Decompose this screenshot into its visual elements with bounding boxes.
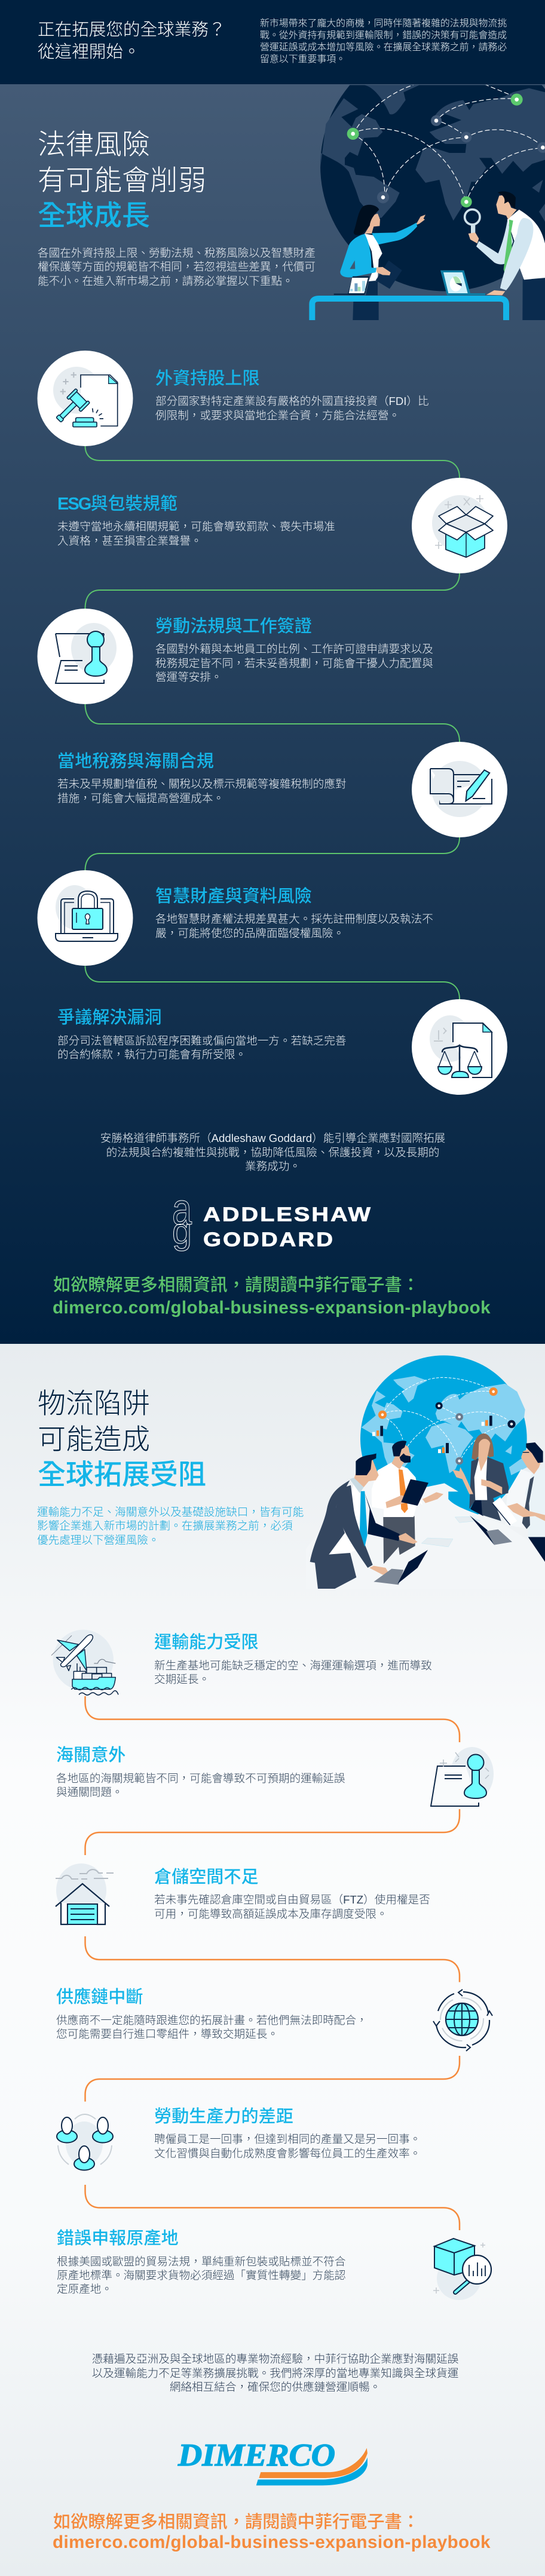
intro heading: 從這裡開始。 xyxy=(38,42,140,61)
icon: box under magnifier xyxy=(433,2239,491,2300)
section lead paragraph: 權保護等方面的規範皆不相同，若忽視這些差異，代價可 xyxy=(38,260,316,273)
connector 4 xyxy=(85,2056,460,2102)
section lead paragraph: 運輸能力不足、海關意外以及基礎設施缺口，皆有可能 xyxy=(37,1506,304,1518)
connector 1 xyxy=(85,1696,460,1742)
intro heading: 正在拓展您的全球業務？ xyxy=(38,20,226,39)
risk: local tax and customs xyxy=(57,752,346,805)
risk: transport capacity: 交期延長。 xyxy=(154,1673,210,1685)
icon: three workers xyxy=(57,2114,113,2170)
risk: dispute resolution: 部分司法管轄區訴訟程序困難或偏向當地一方。若缺乏完善 xyxy=(57,1034,346,1047)
section title xyxy=(38,1387,206,1490)
intro paragraph: 營運延誤或成本增加等風險。在擴展全球業務之前，請務必 xyxy=(260,42,507,53)
illustration: globe with business team xyxy=(306,1355,545,1589)
icon: laptop with padlock xyxy=(37,870,133,966)
icon: rotating globe xyxy=(433,1989,492,2051)
icon: gavel and document xyxy=(37,351,133,446)
risk: IP and data xyxy=(155,887,433,939)
closing text: Addleshaw Goddard xyxy=(100,1132,445,1172)
connector 1 xyxy=(85,446,460,478)
logo: Addleshaw Goddard: a xyxy=(172,1184,192,1234)
section title: 有可能會削弱 xyxy=(38,164,206,196)
logo: Addleshaw Goddard: GODDARD xyxy=(203,1229,335,1251)
section lead paragraph xyxy=(37,1506,304,1546)
section title: 可能造成 xyxy=(38,1423,150,1455)
closing text: Addleshaw Goddard: 的法規與合約複雜性與挑戰，協助降低風險、保護投資，以及長期的 xyxy=(106,1146,439,1159)
risk: customs surprises xyxy=(56,1746,345,1798)
connector 4 xyxy=(85,837,460,871)
risk: labour law and visas: 各國對外籍與本地員工的比例、工作許可證申請要求以及 xyxy=(155,643,433,655)
section title: 全球拓展受阻 xyxy=(38,1459,206,1490)
risk: ESG and packaging: 入資格，甚至損害企業聲譽。 xyxy=(57,535,202,547)
risk: warehouse space: 若未事先確認倉庫空間或自由貿易區（FTZ）使用權是否 xyxy=(154,1893,430,1906)
risk: country of origin: 原產地標準。海關要求貨物必須經過「實質性轉變」方能認 xyxy=(57,2269,345,2282)
risk: warehouse space xyxy=(154,1867,430,1920)
risk: transport capacity xyxy=(154,1633,432,1685)
logo: Dimerco: DIMERCO xyxy=(177,2438,335,2473)
call to action: green: 如欲瞭解更多相關資訊，請閱讀中菲行電子書： xyxy=(53,1276,420,1295)
risk: warehouse space: 可用，可能導致高額延誤成本及庫存調度受限。 xyxy=(154,1908,387,1920)
call to action: orange: dimerco.com/global-business-expansion-playbook xyxy=(53,2532,491,2552)
intro paragraph: 戰。從外資持有規範到運輸限制，錯誤的決策有可能會造成 xyxy=(260,30,507,41)
risk: country of origin: 根據美國或歐盟的貿易法規，單純重新包裝或貼標並不符合 xyxy=(57,2255,345,2268)
risk: labour productivity: 聘僱員工是一回事，但達到相同的產量又是另一回事。 xyxy=(154,2133,421,2145)
risk: local tax and customs: 若未及早規劃增值稅、關稅以及標示規範等複雜稅制的應對 xyxy=(57,778,346,790)
risk: ESG and packaging: ESG與包裝規範 xyxy=(57,495,177,514)
icon: stamp and document xyxy=(37,609,133,704)
closing text: Addleshaw Goddard: 安勝格道律師事務所（Addleshaw Goddard）能引導企業應對國際拓展 xyxy=(100,1132,445,1144)
risk: local tax and customs: 當地稅務與海關合規 xyxy=(57,752,214,771)
logo: Dimerco xyxy=(177,2438,368,2485)
icon: scales and document xyxy=(412,999,507,1095)
intro paragraph xyxy=(260,18,507,65)
risk: transport capacity: 新生產基地可能缺乏穩定的空、海運運輸選項，進而導致 xyxy=(154,1659,432,1672)
risk: supply chain disruption: 您可能需要自行進口零組件，導致交期延長。 xyxy=(56,2028,278,2040)
risk: labour law and visas: 勞動法規與工作簽證 xyxy=(155,617,312,636)
section title: 全球成長 xyxy=(38,199,150,231)
risk: supply chain disruption: 供應商不一定能隨時跟進您的拓展計畫。若他們無法即時配合， xyxy=(56,2014,368,2027)
risk: IP and data: 各地智慧財產權法規差異甚大。採先註冊制度以及執法不 xyxy=(155,913,433,925)
intro paragraph: 新市場帶來了龐大的商機，同時伴隨著複雜的法規與物流挑 xyxy=(260,19,507,29)
call to action: green: dimerco.com/global-business-expansion-playbook xyxy=(53,1297,491,1318)
risk: customs surprises: 各地區的海關規範皆不同，可能會導致不可預期的運輸延誤 xyxy=(56,1772,345,1785)
closing text: Dimerco: 網絡相互結合，確保您的供應鏈營運順暢。 xyxy=(170,2381,381,2393)
risk: transport capacity: 運輸能力受限 xyxy=(154,1633,259,1652)
intro heading xyxy=(38,20,226,61)
risk: country of origin: 定原產地。 xyxy=(57,2283,112,2295)
logo: Addleshaw Goddard: g xyxy=(172,1211,192,1251)
panel: legal risks xyxy=(0,84,545,1344)
risk: foreign ownership caps: 外資持股上限 xyxy=(155,369,260,388)
risk: ESG and packaging: 未遵守當地永續相關規範，可能會導致罰款、喪失市場准 xyxy=(57,520,335,533)
risk: dispute resolution: 的合約條款，執行力可能會有所受限。 xyxy=(57,1048,246,1061)
illustration: globe with two business people xyxy=(309,85,545,320)
panel: logistics pitfalls xyxy=(0,1344,545,2576)
closing text: Dimerco: 以及運輸能力不足等業務擴展挑戰。我們將深厚的當地專業知識與全球貨運 xyxy=(92,2367,458,2380)
risk: local tax and customs: 措施，可能會大幅提高營運成本。 xyxy=(57,792,224,805)
section lead paragraph: 能不小。在進入新市場之前，請務必掌握以下重點。 xyxy=(38,275,293,287)
risk: labour law and visas xyxy=(155,617,433,683)
icon: signed document with pen xyxy=(412,742,507,837)
section title xyxy=(38,128,206,231)
section title: 物流陷阱 xyxy=(38,1387,150,1419)
risk: customs surprises: 與通關問題。 xyxy=(56,1786,123,1798)
connector 5 xyxy=(85,2185,460,2230)
section title: 法律風險 xyxy=(38,128,150,160)
risk: labour law and visas: 營運等安排。 xyxy=(155,671,222,683)
connector 2 xyxy=(85,1809,460,1855)
risk: customs surprises: 海關意外 xyxy=(56,1746,125,1765)
risk: IP and data: 智慧財產與資料風險 xyxy=(155,887,312,906)
connector 5 xyxy=(85,966,460,999)
icon: stamp and document xyxy=(431,1747,494,1806)
icon: warehouse xyxy=(56,1863,114,1924)
section lead paragraph: 各國在外資持股上限、勞動法規、稅務風險以及智慧財產 xyxy=(38,247,316,259)
risk: country of origin: 錯誤申報原產地 xyxy=(57,2229,179,2248)
section lead paragraph: 影響企業進入新市場的計劃。在擴展業務之前，必須 xyxy=(37,1519,293,1532)
risk: dispute resolution xyxy=(57,1008,346,1061)
risk: supply chain disruption xyxy=(56,1988,368,2040)
section lead paragraph: 優先處理以下營運風險。 xyxy=(37,1534,160,1546)
risk: dispute resolution: 爭議解決漏洞 xyxy=(57,1008,162,1027)
logo: Addleshaw Goddard: ADDLESHAW xyxy=(203,1204,372,1226)
icon: open box xyxy=(412,478,507,573)
risk: foreign ownership caps: 部分國家對特定產業設有嚴格的外國直接投資（FDI）比 xyxy=(155,395,429,407)
call to action: green xyxy=(53,1276,491,1318)
risk: country of origin xyxy=(57,2229,345,2295)
logo: Addleshaw Goddard xyxy=(172,1184,372,1251)
call to action: orange: 如欲瞭解更多相關資訊，請閱讀中菲行電子書： xyxy=(53,2512,420,2531)
section lead paragraph xyxy=(38,247,316,287)
risk: foreign ownership caps xyxy=(155,369,429,422)
risk: foreign ownership caps: 例限制，或要求與當地企業合資，方能合法經營。 xyxy=(155,409,400,422)
intro paragraph: 留意以下重要事項。 xyxy=(260,54,345,65)
connector 3 xyxy=(85,704,460,742)
panel: intro header xyxy=(0,0,545,84)
risk: supply chain disruption: 供應鏈中斷 xyxy=(56,1988,143,2007)
closing text: Dimerco xyxy=(92,2353,458,2393)
closing text: Addleshaw Goddard: 業務成功。 xyxy=(245,1160,301,1172)
risk: labour productivity: 文化習慣與自動化成熟度會影響每位員工的生產效率。 xyxy=(154,2147,421,2160)
risk: ESG and packaging xyxy=(57,495,335,547)
connector 2 xyxy=(85,573,460,609)
closing text: Dimerco: 憑藉遍及亞洲及與全球地區的專業物流經驗，中菲行協助企業應對海關延誤 xyxy=(92,2353,458,2365)
icon: plane and container ship xyxy=(51,1630,118,1695)
risk: warehouse space: 倉儲空間不足 xyxy=(154,1867,259,1886)
risk: labour law and visas: 稅務規定皆不同，若未妥善規劃，可能會干擾人力配置與 xyxy=(155,657,433,670)
risk: labour productivity xyxy=(154,2107,421,2160)
connector 3 xyxy=(85,1936,460,1982)
call to action: orange xyxy=(53,2512,491,2552)
risk: IP and data: 嚴，可能將使您的品牌面臨侵權風險。 xyxy=(155,927,344,939)
risk: labour productivity: 勞動生產力的差距 xyxy=(154,2107,293,2126)
